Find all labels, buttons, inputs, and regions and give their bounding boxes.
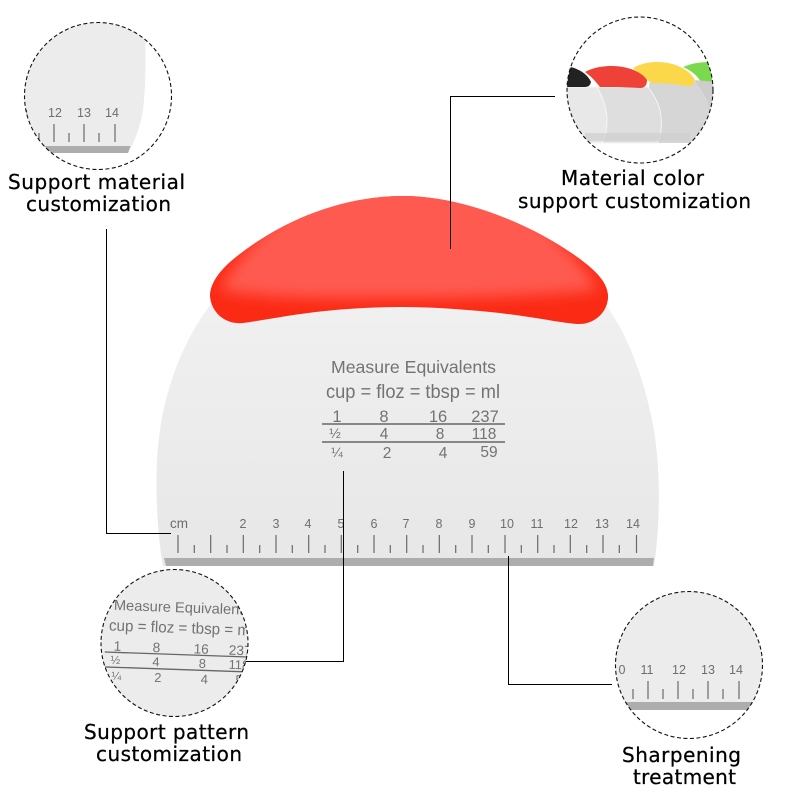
caption: material color support customization: Material color [561, 166, 705, 190]
measure equivalents table: 237 [471, 408, 499, 426]
ruler labels: 11 [531, 517, 544, 531]
measure equivalents table: Measure Equivalents [331, 357, 496, 377]
measure equivalents table: ¼ [331, 444, 343, 460]
inset: pattern close-up [100, 568, 258, 718]
ruler labels: 5 [338, 517, 345, 531]
caption: material color support customization [518, 166, 751, 213]
leader lines [106, 96, 612, 684]
ruler labels [170, 516, 640, 531]
red handle inset [585, 66, 647, 88]
inset: pattern close-up: Measure Equivalents [114, 598, 251, 619]
caption: sharpening treatment: treatment [633, 765, 736, 789]
inset: pattern close-up: 237 [229, 643, 252, 658]
measure equivalents table: 2 [383, 445, 391, 462]
inset: material close-up: 14 [105, 106, 119, 120]
first blade [567, 86, 608, 144]
inset: pattern close-up: 118 [228, 657, 249, 672]
inset: pattern close-up: 4 [200, 672, 208, 687]
measure equivalents table: 4 [380, 426, 389, 443]
caption: support material customization: customization [26, 192, 171, 216]
inset: material close-up: 12 [48, 106, 62, 120]
inset: pattern close-up: ½ [110, 654, 121, 667]
measure equivalents table: ½ [329, 425, 341, 441]
inset: sharpening close-up: 11 [641, 663, 654, 677]
ruler strip [585, 133, 661, 141]
inset: pattern close-up: 8 [199, 656, 206, 671]
ruler labels: 7 [403, 517, 410, 531]
ruler labels: 3 [273, 517, 280, 531]
measure equivalents table: 8 [379, 408, 389, 426]
measure equivalents table: 16 [429, 408, 447, 426]
measure equivalents table: 1 [332, 408, 342, 426]
inset: sharpening close-up: 13 [701, 663, 715, 677]
inset: pattern close-up: 2 [154, 670, 162, 685]
inset: pattern close-up: ¼ [111, 670, 122, 683]
inset: colour variants [560, 17, 716, 163]
inset: sharpening close-up: 0 [619, 663, 626, 677]
measure equivalents table: 59 [480, 444, 498, 461]
inset: sharpening close-up [612, 588, 767, 738]
ruler labels: 8 [436, 517, 443, 531]
caption: sharpening treatment: Sharpening [622, 743, 741, 767]
ruler labels: 13 [595, 517, 609, 531]
inset: pattern close-up: 59 [235, 672, 250, 687]
measure equivalents table: 8 [436, 426, 444, 443]
ruler labels: 6 [371, 517, 378, 531]
inset: material close-up [20, 10, 172, 170]
third blade [649, 82, 710, 143]
caption: support material customization [8, 170, 185, 216]
inset: pattern close-up: 1 [113, 639, 122, 654]
caption: support pattern customization: Support pattern [84, 720, 249, 744]
inset: sharpening close-up: 14 [729, 663, 743, 677]
inset: material close-up: 13 [77, 106, 91, 120]
black handle [567, 67, 591, 87]
caption: material color support customization: support customization [518, 189, 751, 213]
ruler ticks [178, 535, 636, 553]
caption: sharpening treatment [622, 743, 741, 789]
inset: pattern close-up: 16 [193, 641, 209, 657]
measure equivalents table: cup = floz = tbsp = ml [326, 382, 500, 403]
green handle [683, 62, 712, 82]
fourth blade [695, 80, 713, 126]
inset: pattern close-up: 4 [152, 654, 160, 669]
yellow handle [633, 62, 695, 86]
caption: support pattern customization: customization [96, 742, 242, 766]
sharpened edge [164, 558, 654, 566]
inset: pattern close-up: cup = floz = tbsp = ml [109, 618, 254, 640]
ruler labels: 14 [626, 517, 640, 531]
measure equivalents table: 118 [472, 426, 496, 443]
ruler labels: 2 [240, 517, 247, 531]
caption: support pattern customization [84, 720, 249, 766]
red handle [210, 196, 608, 324]
measure equivalents table [322, 357, 505, 462]
scraper blade [156, 303, 659, 566]
inset: pattern close-up: 8 [152, 640, 161, 655]
ruler labels: 12 [564, 517, 578, 531]
ruler labels: 4 [305, 517, 312, 531]
measure equivalents table: 4 [439, 445, 448, 462]
second blade [595, 87, 661, 143]
inset: sharpening close-up: 12 [672, 663, 686, 677]
caption: support material customization: Support material [8, 170, 185, 194]
ruler labels: 9 [469, 517, 476, 531]
ruler labels: cm [170, 516, 188, 531]
ruler labels: 10 [500, 517, 514, 531]
